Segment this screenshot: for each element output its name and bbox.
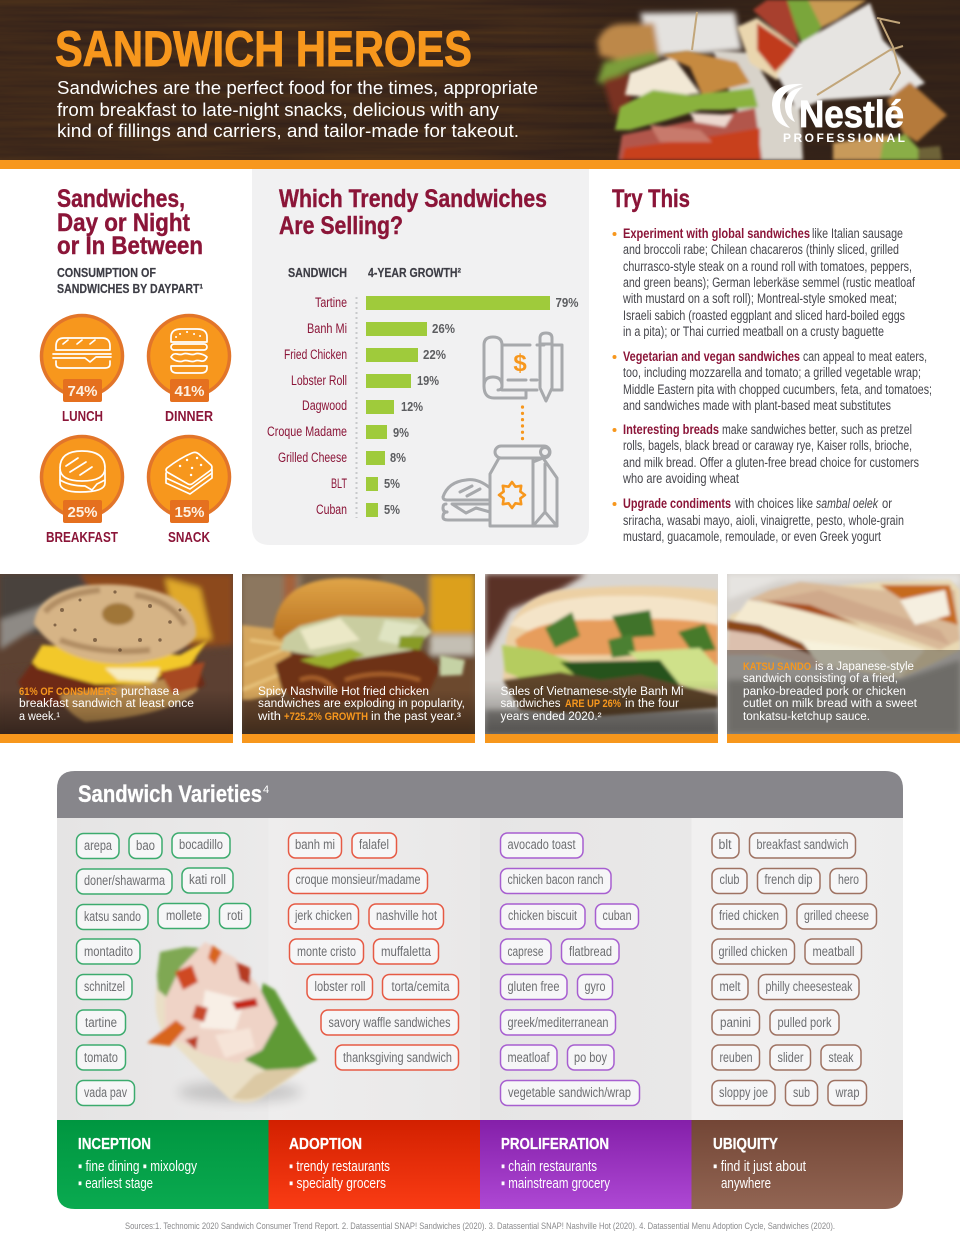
- caption: a week.¹: [19, 711, 60, 723]
- stage: inception: ▪ fine dining ▪ mixology: [78, 1158, 197, 1175]
- pill: gluten free: [500, 974, 567, 1000]
- icon: burger: [171, 329, 207, 373]
- tip: upgrade condiments: Upgrade condiments: [623, 496, 731, 511]
- pill: bocadillo: bocadillo: [179, 837, 223, 852]
- stat: snack 15%: [148, 436, 230, 546]
- pill: cuban: [596, 904, 638, 929]
- stage: adoption: [289, 1136, 390, 1192]
- pill: avocado toast: avocado toast: [508, 837, 576, 852]
- caption: Sales of Vietnamese-style Banh Mi: [500, 686, 684, 698]
- tip: upgrade condiments: sambal oelek: [816, 496, 879, 511]
- pill: cuban: cuban: [602, 908, 632, 923]
- bar chart: 5%: [384, 476, 400, 491]
- stat: lunch 74%: 74%: [67, 383, 98, 400]
- column headers: SANDWICH: [288, 266, 347, 280]
- pill: reuben: reuben: [720, 1050, 752, 1065]
- caption: is a Japanese-style: [815, 661, 914, 673]
- pill: chicken bacon ranch: chicken bacon ranch: [508, 872, 604, 887]
- title: SANDWICH HEROES: [55, 21, 472, 77]
- heading: Sandwiches, Day or Night: Sandwiches,: [57, 185, 185, 213]
- bar chart: 22%: [423, 347, 446, 362]
- pill: falafel: falafel: [359, 837, 389, 852]
- pill: steak: [821, 1045, 861, 1070]
- pill: thanksgiving sandwich: [336, 1045, 458, 1070]
- icon: sub sandwich: [53, 338, 111, 368]
- caption: sandwich consisting of a fried,: [743, 673, 898, 685]
- tip: global sandwiches: with mustard on a soft roll); Montreal-style smoked meat;: [622, 291, 897, 306]
- pill: vegetable sandwich/wrap: vegetable sandwich/wrap: [508, 1085, 631, 1100]
- stage: proliferation: ▪ mainstream grocery: [501, 1175, 610, 1192]
- icon: menu and pencil: $: [513, 350, 527, 377]
- pill: savory waffle sandwiches: [321, 1010, 458, 1035]
- column headers: [288, 266, 461, 280]
- pills: adoption column: [288, 833, 458, 1070]
- heading: which trendy sandwiches: Which Trendy Sandwiches: [279, 185, 547, 213]
- column headers: 4-YEAR GROWTH²: [368, 266, 461, 280]
- pill: panini: panini: [720, 1015, 751, 1030]
- intro text: from breakfast to late-night snacks, delicious with any: [57, 99, 500, 120]
- pill: meatloaf: [500, 1045, 557, 1070]
- photo card: nashville hot chicken: [242, 574, 475, 743]
- pill: philly cheesesteak: philly cheesesteak: [766, 979, 853, 994]
- tip: interesting breads: make sandwiches better, such as pretzel: [722, 422, 912, 437]
- heading: sandwich varieties: Sandwich Varieties: [78, 781, 262, 808]
- stage: adoption: ▪ specialty grocers: [289, 1175, 386, 1192]
- stage: adoption: ADOPTION: [289, 1136, 362, 1153]
- pill: meatloaf: meatloaf: [508, 1050, 550, 1065]
- icon: menu and pencil: [484, 333, 562, 401]
- tip: upgrade condiments: [612, 496, 904, 544]
- pill: sub: [786, 1080, 818, 1106]
- pill: doner/shawarma: doner/shawarma: [84, 873, 165, 888]
- pill: meatball: [805, 939, 862, 964]
- tip: interesting breads: Interesting breads: [623, 422, 719, 437]
- tip: global sandwiches: Experiment with global sandwiches: [623, 226, 810, 241]
- pill: melt: melt: [720, 979, 741, 994]
- pill: caprese: [500, 939, 551, 964]
- photo card: banh mi: [485, 574, 718, 743]
- logo: Nestle Professional: [772, 84, 905, 145]
- bar chart: 19%: [417, 373, 439, 388]
- subheading: consumption: SANDWICHES BY DAYPART¹: [57, 282, 203, 296]
- pill: meatball: meatball: [812, 944, 854, 959]
- stage: inception: INCEPTION: [78, 1136, 151, 1153]
- pill: philly cheesesteak: [758, 974, 859, 1000]
- pill: banh mi: banh mi: [295, 837, 335, 852]
- photo card: bagel breakfast sandwich: [0, 574, 233, 743]
- pill: croque monsieur/madame: croque monsieur/madame: [296, 872, 420, 887]
- photo card: katsu sando: [727, 574, 960, 743]
- stage: ubiquity: UBIQUITY: [713, 1136, 778, 1153]
- tip: upgrade condiments: or: [882, 496, 892, 511]
- pill: kati roll: [182, 868, 233, 893]
- pill: pulled pork: [770, 1010, 839, 1035]
- pill: blt: blt: [718, 837, 732, 852]
- pill: thanksgiving sandwich: thanksgiving sandwich: [343, 1050, 452, 1065]
- pill: po boy: [568, 1045, 614, 1070]
- pill: bocadillo: [172, 833, 230, 858]
- stage: inception: [78, 1136, 197, 1192]
- pill: muffaletta: [374, 939, 438, 964]
- pill: po boy: po boy: [574, 1050, 607, 1065]
- heading: which trendy sandwiches: [279, 185, 547, 240]
- caption: [19, 686, 194, 723]
- bar chart: [267, 295, 579, 518]
- bar chart: Tartine: [315, 295, 347, 310]
- stat: snack 15%: SNACK: [168, 530, 210, 546]
- pill: croque monsieur/madame: [288, 868, 428, 894]
- heading: sandwich varieties: 4: [263, 784, 269, 796]
- caption: [500, 686, 684, 723]
- pill: greek/mediterranean: [500, 1010, 616, 1035]
- pills: ubiquity column: [712, 833, 876, 1106]
- pill: wrap: [828, 1080, 866, 1106]
- pill: vada pav: [76, 1080, 134, 1106]
- stat: breakfast 25%: 25%: [67, 504, 98, 521]
- bar chart: Dagwood: [302, 398, 347, 413]
- pill: monte cristo: monte cristo: [297, 944, 356, 959]
- heading: Sandwiches, Day or Night: or In Between: [57, 232, 203, 260]
- pill: schnitzel: [76, 974, 132, 1000]
- pill: flatbread: [562, 939, 619, 964]
- pill: arepa: [76, 834, 119, 858]
- pill: chicken bacon ranch: [500, 868, 611, 894]
- icon: toast sandwich: [166, 452, 212, 494]
- pill: nashville hot: nashville hot: [376, 908, 437, 923]
- pill: slider: slider: [778, 1050, 804, 1065]
- caption: purchase a: [121, 686, 180, 698]
- pill: french dip: [758, 868, 820, 894]
- caption: +725.2% GROWTH: [284, 711, 368, 723]
- pill: tartine: tartine: [85, 1015, 117, 1030]
- pill: muffaletta: muffaletta: [381, 944, 431, 959]
- pill: bao: [129, 834, 162, 858]
- heading: which trendy sandwiches: Are Selling?: [279, 212, 403, 240]
- pill: arepa: arepa: [84, 838, 112, 853]
- stat: dinner 41%: [148, 316, 230, 425]
- pill: wrap: wrap: [835, 1085, 860, 1100]
- intro text: [57, 77, 538, 141]
- pill: roti: [220, 904, 250, 928]
- tip: interesting breads: who are avoiding wheat: [622, 471, 739, 486]
- stage: proliferation: ▪ chain restaurants: [501, 1158, 597, 1175]
- pill: hero: [830, 868, 866, 894]
- tip: global sandwiches: [612, 226, 915, 339]
- caption: years ended 2020.²: [500, 711, 602, 723]
- caption: [743, 661, 918, 723]
- pill: vegetable sandwich/wrap: [500, 1080, 640, 1106]
- stage: ubiquity: anywhere: [721, 1175, 771, 1192]
- stat: dinner 41%: DINNER: [165, 409, 213, 425]
- caption: 61% OF CONSUMERS: [19, 686, 117, 698]
- tip: interesting breads: [612, 422, 919, 486]
- caption: breakfast sandwich at least once: [19, 698, 194, 710]
- pill: torta/cemita: torta/cemita: [392, 979, 450, 994]
- pill: chicken biscuit: [500, 904, 585, 929]
- pill: katsu sando: katsu sando: [84, 909, 141, 924]
- stat: snack 15%: 15%: [174, 504, 205, 521]
- pill: savory waffle sandwiches: savory waffle sandwiches: [328, 1015, 451, 1030]
- pill: avocado toast: [500, 833, 583, 858]
- pill: banh mi: [288, 833, 342, 858]
- stat: breakfast 25%: BREAKFAST: [46, 530, 118, 546]
- tip: global sandwiches: like Italian sausage: [812, 226, 903, 241]
- caption: cutlet on milk bread with a sweet: [743, 698, 918, 710]
- pill: lobster roll: [307, 974, 372, 1000]
- pill: katsu sando: [76, 904, 148, 930]
- pill: bao: bao: [136, 838, 155, 853]
- bar chart: Croque Madame: [267, 424, 347, 439]
- caption: sandwiches are exploding in popularity,: [258, 698, 465, 710]
- pill: roti: roti: [227, 908, 243, 923]
- pill: schnitzel: schnitzel: [84, 979, 125, 994]
- bar chart: 79%: [556, 295, 579, 310]
- pill: fried chicken: fried chicken: [719, 908, 779, 923]
- stage: adoption: ▪ trendy restaurants: [289, 1158, 390, 1175]
- pill: sloppy joe: sloppy joe: [719, 1085, 768, 1100]
- bar chart: 5%: [384, 502, 400, 517]
- adoption stage band: [57, 1120, 903, 1209]
- stat: lunch 74%: LUNCH: [62, 409, 103, 425]
- tip: vegetarian and vegan: [612, 349, 932, 413]
- intro text: Sandwiches are the perfect food for the times, appropriate: [57, 77, 538, 98]
- pill: monte cristo: [290, 939, 364, 964]
- pills: proliferation column: [500, 833, 640, 1106]
- caption: Spicy Nashville Hot fried chicken: [258, 686, 429, 698]
- pill: sloppy joe: [712, 1080, 775, 1106]
- tip: global sandwiches: in a pita); or Thai curried meatball on a crusty baguette: [623, 324, 884, 339]
- pill: montadito: montadito: [84, 944, 133, 959]
- heading: Sandwiches, Day or Night: Day or Night: [57, 209, 191, 237]
- header orange bar: [0, 160, 960, 169]
- photo: lobster roll: [147, 942, 317, 1103]
- pill: club: club: [720, 872, 740, 887]
- header bar: [57, 771, 903, 818]
- panel: try this: [612, 185, 932, 544]
- subheading: consumption: [57, 266, 203, 296]
- caption: tonkatsu-ketchup sauce.: [743, 711, 870, 723]
- pill: torta/cemita: [382, 974, 458, 1000]
- pill: tomato: [76, 1045, 126, 1070]
- caption: [257, 686, 465, 723]
- bar chart: Cuban: [316, 502, 347, 517]
- pill: nashville hot: [369, 904, 444, 929]
- pill: sub: sub: [793, 1085, 810, 1100]
- logo: Nestle Professional: Nestlé: [799, 94, 904, 136]
- intro text: kind of fillings and carriers, and tailor-made for takeout.: [57, 120, 519, 141]
- caption: in the past year.³: [371, 711, 461, 723]
- dotted connector: [521, 407, 524, 439]
- stage: ubiquity: [713, 1136, 807, 1192]
- bar chart: 8%: [390, 450, 406, 465]
- pill: grilled cheese: grilled cheese: [804, 908, 869, 923]
- pill: grilled chicken: grilled chicken: [718, 944, 788, 959]
- pill: chicken biscuit: chicken biscuit: [508, 908, 577, 923]
- pill: reuben: [712, 1045, 760, 1070]
- caption: in the four: [625, 698, 679, 710]
- icon: takeout bag and sandwich: [443, 446, 557, 526]
- pill: breakfast sandwich: [750, 833, 856, 858]
- pill: greek/mediterranean: greek/mediterranean: [508, 1015, 608, 1030]
- pill: kati roll: kati roll: [189, 872, 226, 887]
- caption: sandwiches: [500, 698, 561, 710]
- photo: wrapped sandwiches: [597, 0, 947, 160]
- pill: blt: [712, 833, 739, 858]
- bar chart: Fried Chicken: [284, 347, 347, 362]
- pill: montadito: [76, 939, 140, 964]
- pill: vada pav: vada pav: [84, 1085, 127, 1100]
- bar chart: Banh Mi: [307, 321, 347, 336]
- caption: with: [257, 711, 281, 723]
- tip: vegetarian and vegan: can appeal to meat eaters,: [803, 349, 927, 364]
- pill: doner/shawarma: [76, 869, 172, 894]
- pill: falafel: [352, 833, 396, 858]
- pill: caprese: caprese: [508, 944, 544, 959]
- pill: gyro: gyro: [584, 979, 606, 994]
- pill: grilled cheese: [797, 904, 876, 929]
- icon: breakfast muffin: [60, 451, 105, 492]
- pill: panini: [712, 1010, 760, 1035]
- stat: lunch 74%: [42, 316, 122, 425]
- pill: mollete: [158, 904, 209, 928]
- pill: lobster roll: lobster roll: [314, 979, 366, 994]
- stat: breakfast 25%: [42, 436, 122, 546]
- pill: flatbread: flatbread: [569, 944, 612, 959]
- stat: dinner 41%: 41%: [174, 383, 205, 400]
- bar chart: 9%: [393, 425, 409, 440]
- tip: vegetarian and vegan: Vegetarian and vegan sandwiches: [623, 349, 800, 364]
- pill: steak: steak: [828, 1050, 854, 1065]
- pill: gluten free: gluten free: [508, 979, 560, 994]
- pill: jerk chicken: jerk chicken: [294, 908, 352, 923]
- pill: fried chicken: [712, 904, 786, 929]
- pill: gyro: [578, 974, 612, 1000]
- logo: Nestle Professional: PROFESSIONAL: [783, 131, 905, 145]
- stage: proliferation: [501, 1136, 610, 1192]
- tip: vegetarian and vegan: and sandwiches made with plant-based meat substitutes: [623, 398, 891, 413]
- heading: try this: Try This: [612, 185, 690, 213]
- tip: upgrade condiments: with choices like: [734, 496, 813, 511]
- pills: inception column: [76, 833, 250, 1106]
- caption: ARE UP 26%: [565, 698, 621, 710]
- orange base: [485, 734, 718, 743]
- heading: Sandwiches, Day or Night: [57, 185, 203, 260]
- caption: panko-breaded pork or chicken: [743, 686, 906, 698]
- bar chart: BLT: [331, 476, 347, 491]
- stage: proliferation: PROLIFERATION: [501, 1136, 609, 1153]
- pill: slider: [770, 1045, 810, 1070]
- bar chart: 26%: [432, 321, 455, 336]
- pill: hero: hero: [838, 872, 859, 887]
- subheading: consumption: CONSUMPTION OF: [57, 266, 156, 280]
- orange base: [727, 734, 960, 743]
- bar chart: Grilled Cheese: [278, 450, 347, 465]
- pill: french dip: french dip: [764, 872, 812, 887]
- pill: mollete: mollete: [166, 908, 202, 923]
- header banner: [0, 0, 960, 160]
- bar chart: 12%: [401, 399, 423, 414]
- bar chart: Lobster Roll: [291, 373, 347, 388]
- pill: melt: [712, 974, 748, 1000]
- stage: ubiquity: ▪ find it just about: [713, 1158, 807, 1175]
- pill: tomato: tomato: [84, 1050, 118, 1065]
- pill: tartine: [76, 1010, 126, 1035]
- panel: sandwich varieties: [57, 771, 903, 1209]
- pill: breakfast sandwich: breakfast sandwich: [756, 837, 848, 852]
- pill: jerk chicken: [288, 904, 358, 929]
- pill: grilled chicken: [712, 939, 794, 964]
- caption: KATSU SANDO: [743, 661, 811, 673]
- orange base: [0, 734, 233, 743]
- panel: trendy sandwiches chart: [252, 169, 589, 545]
- orange base: [242, 734, 475, 743]
- panel: dayparts: [42, 185, 230, 546]
- stage: inception: ▪ earliest stage: [78, 1175, 153, 1192]
- pill: club: [712, 868, 747, 894]
- tip: upgrade condiments: mustard, guacamole, remoulade, or even Greek yogurt: [623, 529, 881, 544]
- pill: pulled pork: pulled pork: [778, 1015, 832, 1030]
